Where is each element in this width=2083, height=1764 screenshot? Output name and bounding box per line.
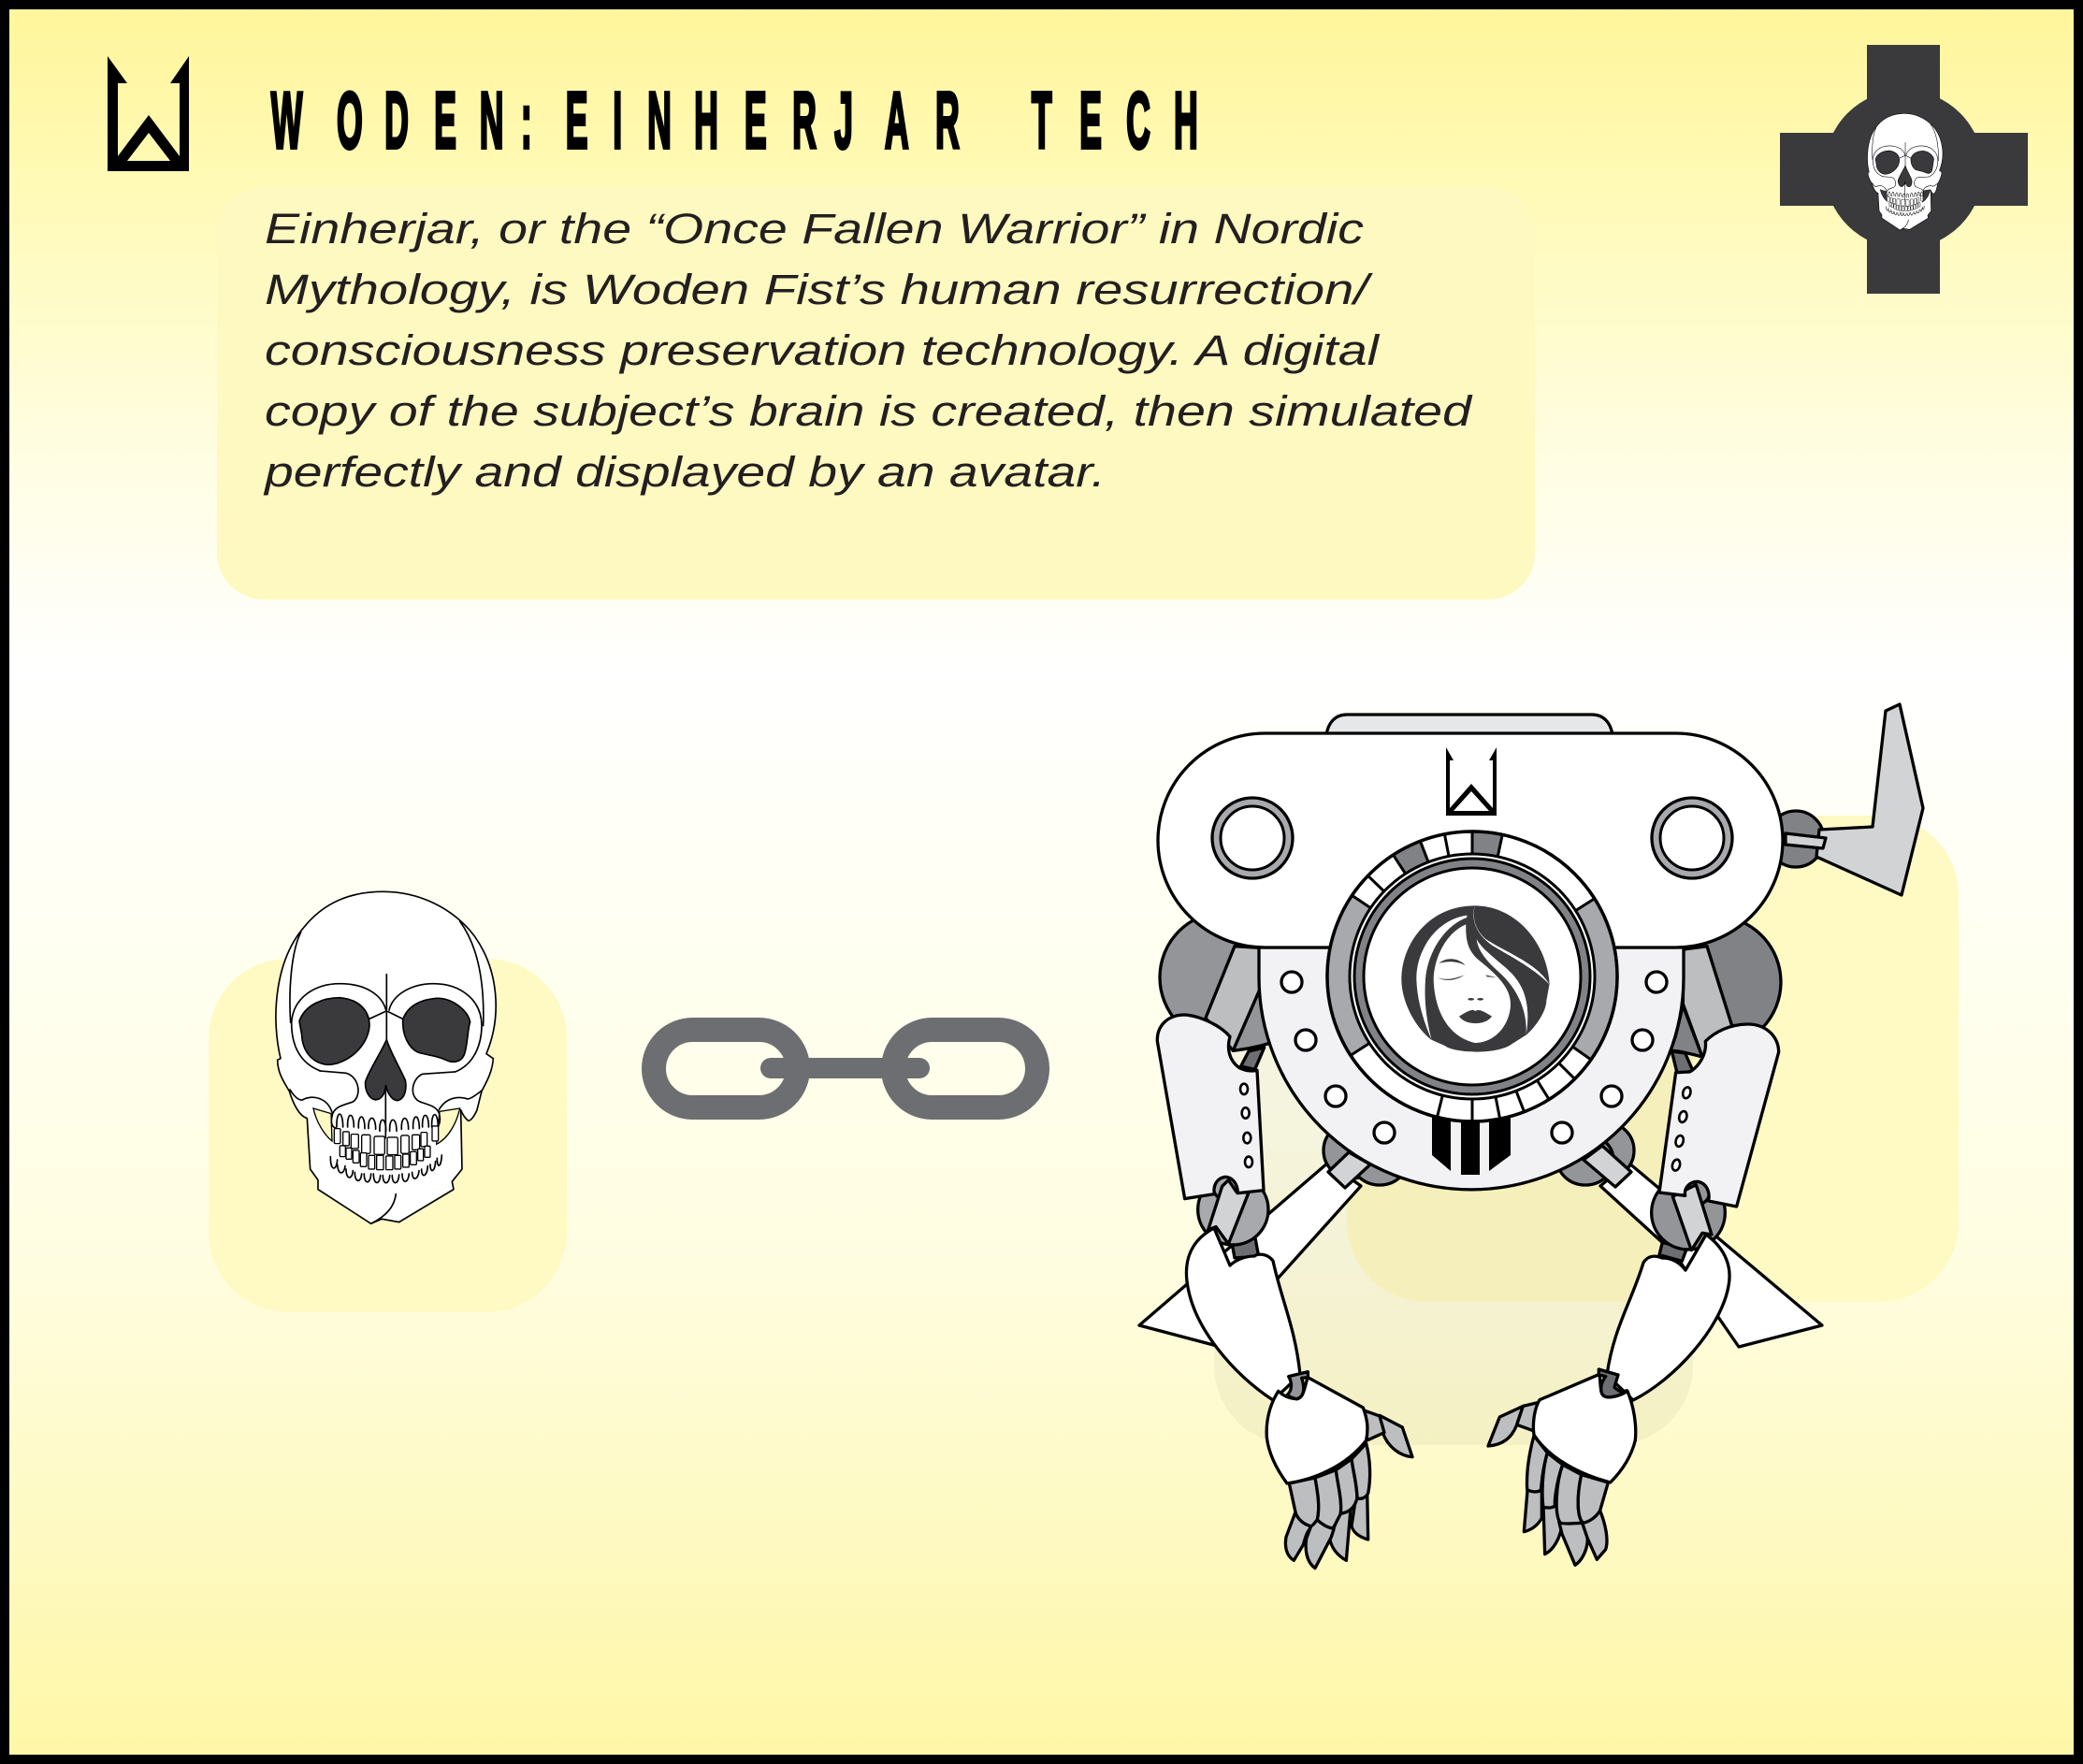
right shoulder	[1649, 916, 1781, 1074]
panel: skull backdrop	[209, 959, 567, 1312]
right hip joint	[1557, 1122, 1634, 1187]
text block: description: consciousness preservation technology. A digital	[265, 326, 1381, 374]
illustration: robot avatar	[1139, 704, 1923, 1569]
title: WODEN: EINHERJAR TECH	[271, 76, 1198, 165]
head capsule	[1158, 733, 1783, 947]
head emblem	[1446, 747, 1497, 816]
right elbow joint	[1652, 1176, 1725, 1261]
left upper arm	[1157, 1015, 1264, 1199]
body bolts	[1281, 972, 1667, 1143]
text block: description: Einherjar, or the “Once Fallen Warrior” in Nordic	[265, 205, 1364, 253]
body plate	[1259, 947, 1684, 1190]
left hand	[1266, 1372, 1412, 1569]
left leg blade	[1139, 1163, 1361, 1347]
portrait: woman's face	[1401, 905, 1550, 1052]
chest dial	[1327, 831, 1617, 1121]
text block: description: perfectly and displayed by an avatar.	[263, 448, 1106, 496]
chest stripes	[1432, 1113, 1511, 1175]
panel: description	[217, 187, 1535, 600]
panel: robot backdrop right	[1347, 816, 1959, 1302]
icon: skull cross emblem	[1780, 45, 2028, 294]
logo: Woden mark	[108, 56, 189, 171]
panel: robot backdrop lower	[1214, 935, 1693, 1445]
right forearm	[1607, 1235, 1729, 1400]
left forearm	[1186, 1228, 1300, 1400]
right upper arm	[1659, 1024, 1779, 1207]
right leg blade	[1600, 1163, 1822, 1347]
head top lip	[1326, 715, 1613, 735]
left hip joint	[1324, 1122, 1408, 1188]
right eye ring	[1652, 798, 1732, 878]
left eye ring	[1212, 798, 1293, 878]
icon: chain link	[654, 1030, 1037, 1107]
left elbow joint	[1198, 1175, 1268, 1258]
text block: description	[263, 205, 1473, 496]
illustration: human skull	[276, 891, 496, 1223]
right hand	[1488, 1369, 1636, 1565]
left shoulder	[1160, 912, 1291, 1069]
antenna	[1768, 704, 1923, 895]
text block: description: Mythology, is Woden Fist’s human resurrection/	[265, 266, 1374, 313]
text block: description: copy of the subject’s brain is created, then simulated	[265, 387, 1473, 435]
